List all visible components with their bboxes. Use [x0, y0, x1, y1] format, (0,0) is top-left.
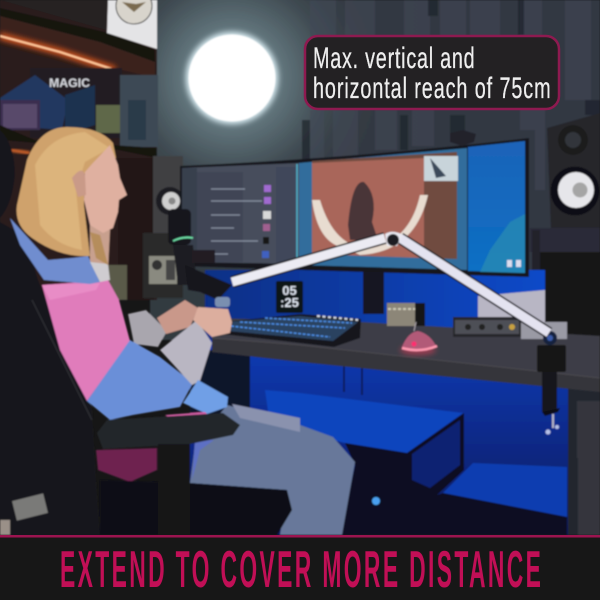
cables [344, 366, 362, 395]
ring lamp [186, 32, 278, 124]
ultrawide curved monitor [180, 138, 529, 277]
arm segments [232, 238, 385, 282]
lower shelf [0, 125, 157, 158]
LED strip [0, 36, 115, 70]
rear speaker [153, 156, 184, 236]
gaming chair back [0, 130, 100, 535]
monitor stand [363, 272, 384, 314]
bottom banner [0, 535, 600, 600]
Magic card boxes: MAGIC [49, 76, 90, 90]
face [84, 145, 127, 233]
front hand [193, 307, 232, 337]
keyboard [222, 314, 361, 347]
app window [182, 163, 300, 264]
desk clock [276, 281, 303, 313]
blue back light under monitor [205, 270, 545, 345]
safe [143, 233, 183, 298]
desk clock: 05 [282, 283, 297, 298]
audio interface [453, 317, 567, 339]
small device on desk [387, 303, 425, 326]
screen blue frame [299, 148, 467, 270]
storage box 1 [265, 390, 464, 535]
desk clock: :25 [280, 295, 299, 310]
hood [10, 218, 100, 284]
video frame [312, 152, 457, 259]
Magic card boxes [0, 68, 158, 147]
chair armrest [97, 413, 240, 535]
hair [17, 127, 116, 256]
left dark cabinet [190, 350, 250, 425]
clamp [537, 331, 566, 434]
webcam [450, 130, 476, 146]
poster [107, 0, 157, 49]
hem [183, 380, 228, 414]
callout: reach: Max. vertical and [313, 42, 475, 75]
background: acoustic panel wall [82, 0, 600, 340]
person [10, 127, 355, 535]
pink lower torso [96, 448, 157, 482]
desk [212, 318, 600, 392]
RGB mouse [400, 322, 437, 355]
shelves with collectibles and LED strip [0, 0, 158, 300]
storage box 2 [437, 463, 567, 535]
banner heading: EXTEND TO COVER MORE DISTANCE [60, 540, 541, 599]
blue sleeve [87, 340, 193, 420]
pink torso [42, 280, 130, 401]
neck [90, 222, 110, 270]
callout: reach: horizontal reach of 75cm [313, 72, 551, 105]
callout: reach [305, 36, 559, 109]
microphone [168, 209, 232, 300]
under-desk area [190, 340, 600, 535]
boom arm and clamp [232, 232, 566, 434]
jeans [190, 404, 355, 535]
studio monitor speaker [530, 113, 600, 337]
rear sleeve and hand [128, 310, 167, 347]
blue wallpaper [468, 141, 525, 273]
grey sleeve [160, 320, 212, 385]
white box behind audio interface [478, 290, 545, 336]
drawer unit [568, 388, 600, 535]
seat [100, 480, 292, 535]
